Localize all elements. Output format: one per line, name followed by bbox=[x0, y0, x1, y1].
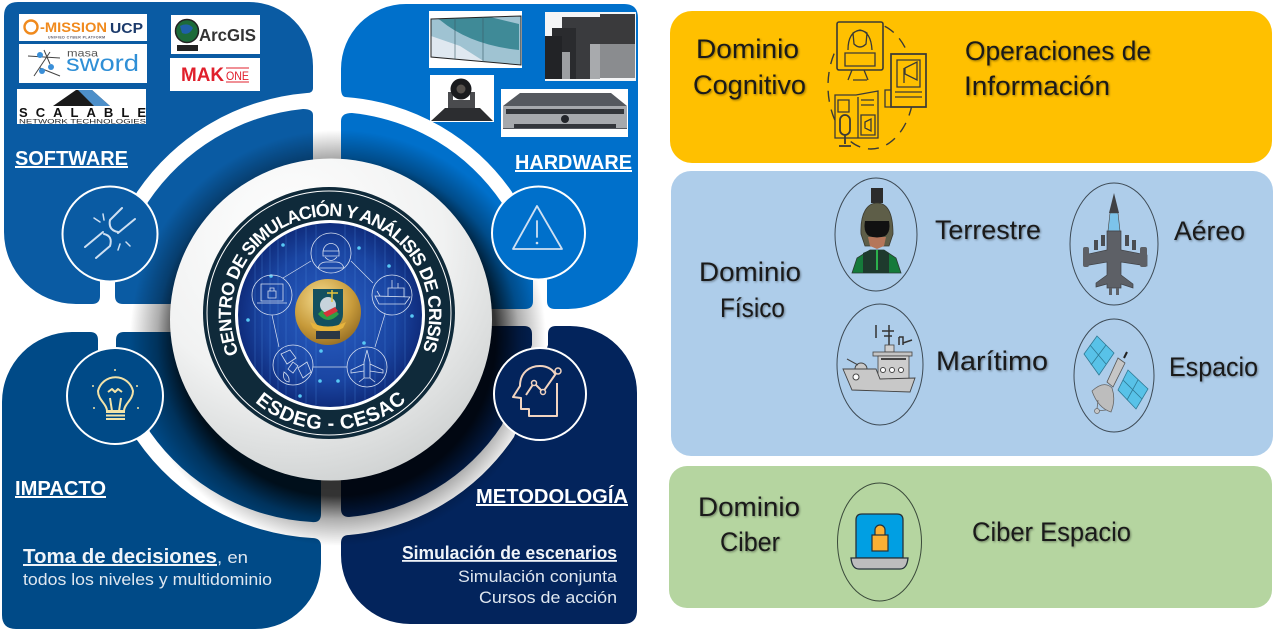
icon: head with chart bbox=[494, 348, 586, 440]
label: dominio cognitivo: Cognitivo bbox=[693, 70, 806, 100]
emblem icon: laptop bbox=[252, 275, 292, 315]
text: toma de decisiones: todos los niveles y multidominio bbox=[23, 570, 272, 589]
ring subtitle: ESDEG - CESAC bbox=[256, 392, 404, 429]
label: operaciones de informacion: Información bbox=[964, 71, 1110, 101]
image: rack server bbox=[501, 89, 628, 137]
icon: light bulb bbox=[67, 348, 163, 444]
ring title: CENTRO DE SIMULACIÓN Y ANÁLISIS DE CRISIS bbox=[218, 200, 442, 356]
logo: Scalable Network Technologies: SCALABLE bbox=[19, 105, 146, 120]
label: terrestre: Terrestre bbox=[935, 215, 1041, 245]
text: simulacion de escenarios: Cursos de acción bbox=[479, 588, 617, 607]
logo: Masa Sword: sword bbox=[66, 50, 139, 76]
label: dominio ciber bbox=[698, 492, 800, 557]
text: toma de decisiones bbox=[23, 546, 272, 589]
pentagon connectors bbox=[272, 261, 385, 367]
label: dominio ciber: Dominio bbox=[698, 492, 800, 522]
logo: Scalable Network Technologies bbox=[17, 89, 147, 126]
label: dominio ciber: Ciber bbox=[720, 527, 780, 557]
white disc bbox=[170, 158, 492, 480]
label: dominio fisico bbox=[699, 257, 801, 323]
logo: MAK ONE: ONE bbox=[226, 71, 249, 83]
label: dominio cognitivo bbox=[693, 34, 806, 100]
text: simulacion de escenarios bbox=[402, 543, 618, 607]
text: toma de decisiones: , en bbox=[217, 548, 248, 567]
central emblem bbox=[170, 158, 492, 480]
hardware images bbox=[429, 11, 636, 137]
icon: soldier bbox=[835, 178, 917, 291]
label: dominio cognitivo: Dominio bbox=[696, 34, 799, 64]
label: espacio: Espacio bbox=[1169, 352, 1258, 382]
logo: Q-Mission UCP: -MISSION bbox=[40, 19, 107, 35]
heading: metodologia: METODOLOGÍA bbox=[476, 485, 628, 508]
logo: MAK ONE bbox=[170, 58, 260, 91]
text: toma de decisiones: Toma de decisiones bbox=[23, 546, 217, 568]
icon: warning triangle bbox=[492, 186, 585, 280]
panel: metodologia bbox=[341, 326, 637, 624]
logo: ArcGIS bbox=[171, 15, 260, 54]
label: ciber espacio: Ciber Espacio bbox=[972, 517, 1131, 547]
logo: Q-Mission UCP bbox=[19, 14, 147, 41]
panel: hardware bbox=[341, 4, 638, 309]
panel: dominio ciber bbox=[669, 466, 1272, 608]
logo: Masa Sword bbox=[19, 44, 147, 83]
icon: broken chain bbox=[62, 186, 158, 282]
icon: ship bbox=[837, 304, 923, 425]
heading: impacto: IMPACTO bbox=[15, 478, 106, 500]
logo: ArcGIS: ArcGIS bbox=[199, 25, 256, 45]
emblem icon: satellite bbox=[273, 345, 313, 385]
label: dominio fisico: Físico bbox=[720, 293, 785, 323]
label: dominio fisico: Dominio bbox=[699, 257, 801, 287]
emblem icon: soldier bbox=[311, 233, 351, 273]
panel: software bbox=[4, 2, 313, 304]
logo: Q-Mission UCP: UCP bbox=[110, 21, 143, 37]
icon: fighter jet bbox=[1070, 183, 1158, 305]
image: PTZ camera bbox=[430, 75, 494, 122]
software logos bbox=[17, 14, 260, 126]
logo: Masa Sword: masa bbox=[67, 48, 98, 60]
label: operaciones de informacion: Operaciones de bbox=[965, 36, 1151, 66]
dark ring bbox=[203, 187, 455, 439]
label: operaciones de informacion bbox=[964, 36, 1151, 101]
disc shadow bbox=[130, 130, 546, 546]
image: video wall bbox=[429, 11, 522, 68]
heading: software: SOFTWARE bbox=[15, 148, 128, 170]
blue circuit disc bbox=[235, 220, 425, 410]
text: simulacion de escenarios: Simulación conjunta bbox=[458, 567, 618, 586]
logo: MAK ONE: MAK bbox=[181, 65, 224, 86]
panel: impacto bbox=[2, 332, 321, 629]
label: maritimo: Marítimo bbox=[936, 346, 1048, 376]
icon: laptop with padlock bbox=[838, 483, 922, 601]
panel: dominio cognitivo bbox=[670, 11, 1272, 163]
icon: satellite bbox=[1074, 319, 1154, 432]
label: aereo: Aéreo bbox=[1174, 216, 1245, 246]
emblem icon: ship bbox=[372, 275, 412, 315]
logo: Q-Mission UCP: UNIFIED CYBER PLATFORM bbox=[48, 36, 105, 40]
panel: dominio fisico bbox=[671, 171, 1273, 456]
image: desktop computers bbox=[545, 12, 636, 81]
heading: hardware: HARDWARE bbox=[515, 152, 632, 174]
emblem icon: plane bbox=[347, 347, 387, 387]
gold badge bbox=[295, 279, 361, 345]
logo: Scalable Network Technologies: NETWORK TECHNOLOGIES bbox=[19, 118, 147, 126]
icon: information media bbox=[828, 22, 926, 149]
text: simulacion de escenarios: Simulación de escenarios bbox=[402, 543, 617, 563]
